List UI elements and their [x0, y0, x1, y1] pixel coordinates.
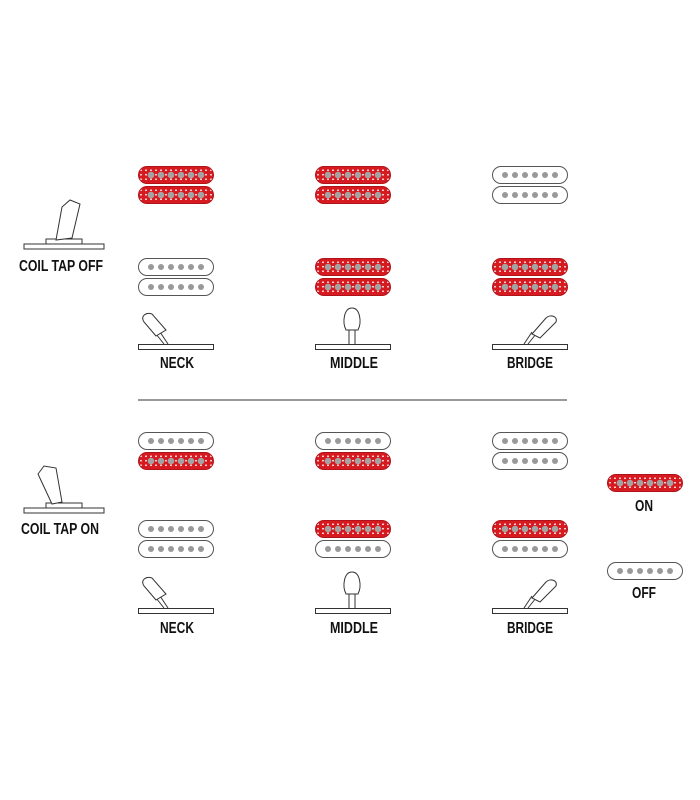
switches top: [138, 308, 568, 350]
row: coil tap on pickups: [138, 432, 568, 558]
switches bottom: [138, 572, 568, 614]
labels bottom: NECK: [160, 620, 194, 637]
labels bottom: MIDDLE: [330, 620, 378, 637]
switch: coil tap off: [19, 200, 104, 275]
labels top: NECK: [160, 355, 194, 372]
row: coil tap off pickups: [138, 166, 568, 296]
labels bottom: [160, 620, 553, 637]
labels bottom: BRIDGE: [507, 620, 553, 637]
labels top: BRIDGE: [507, 355, 553, 372]
switch: coil tap off: COIL TAP OFF: [19, 258, 103, 275]
divider: [138, 399, 567, 401]
labels top: MIDDLE: [330, 355, 378, 372]
labels top: [160, 355, 553, 372]
legend: ON: [635, 498, 653, 515]
legend: OFF: [632, 585, 656, 602]
switch: coil tap on: COIL TAP ON: [21, 521, 99, 538]
legend: [608, 474, 682, 602]
switch: coil tap on: [21, 466, 104, 538]
